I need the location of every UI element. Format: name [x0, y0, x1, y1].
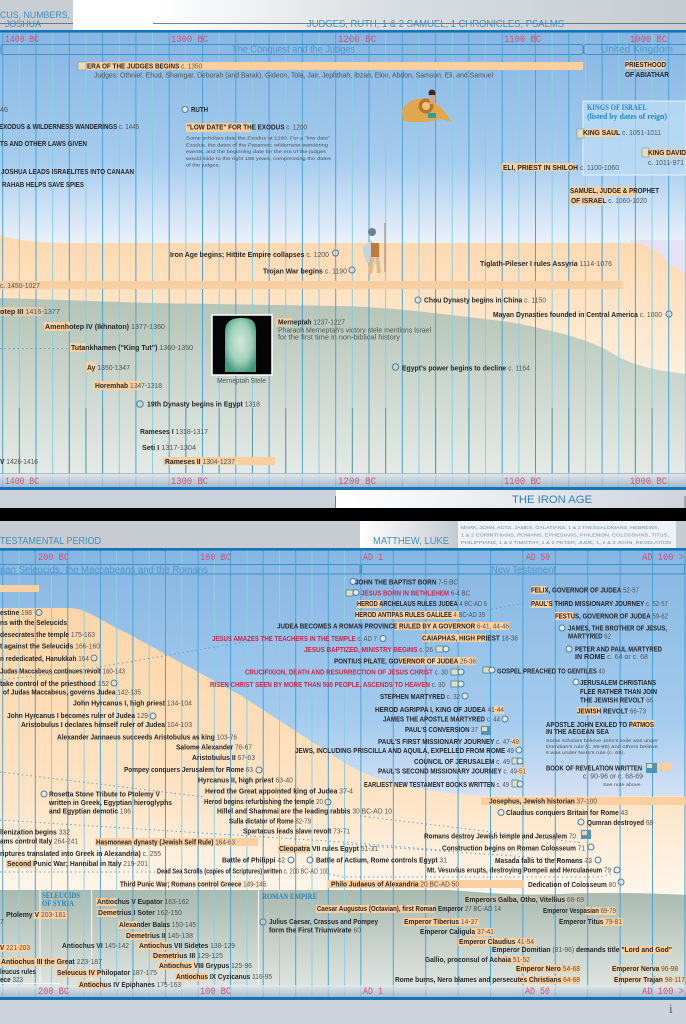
- era bar: united kingdom: United Kingdom: [601, 44, 673, 56]
- felix: FELIX, GOVERNOR OF JUDEA 52-57: [531, 586, 639, 594]
- header band: [0, 0, 686, 31]
- era bar: seleucids, maccabeans, romans: rian Seleucids, the Maccabeans and the Romans: [0, 565, 208, 576]
- stele caption: Merneptah Stele: [217, 376, 266, 385]
- era bar: conquest and judges: The Conquest and the Judges: [232, 44, 355, 56]
- long bar 1450-1027: [0, 281, 623, 290]
- top year scale: 100 BC: [200, 553, 231, 564]
- maccabean entries: Hillel and Shammai are the leading rabbis 30 BC-AD 10: [217, 806, 392, 816]
- jerusalem christians: [573, 678, 657, 704]
- battle of philippi: Battle of Philippi 42: [222, 856, 285, 864]
- eli: ELI, PRIEST IN SHILOH c. 1100-1060: [503, 163, 619, 172]
- top year scale: 1400 BC: [5, 35, 39, 46]
- panel: intertestamental period and new testament: [0, 521, 686, 1024]
- laws given: TS AND OTHER LAWS GIVEN: [0, 139, 87, 148]
- antiochus ix: Antiochus IX Cyzicanus 116-95: [176, 972, 272, 981]
- dotted connectors: [0, 603, 617, 877]
- green lowland band: [0, 890, 686, 998]
- antiochus iii: Antiochus III the Great 223-187: [1, 957, 102, 966]
- kings of israel panel: (listed by dates of reign): [587, 112, 667, 121]
- panel: the iron age timeline: [0, 0, 686, 508]
- seleucus rules: leucus rules: [0, 967, 36, 976]
- sky background: [0, 32, 686, 247]
- samuel: SAMUEL, JUDGE & PROPHET: [570, 186, 659, 195]
- bottom year scale: AD 1: [363, 987, 383, 998]
- footer band with the iron age title: [0, 487, 686, 508]
- james the brother of jesus: MARTYRED 62: [568, 632, 611, 640]
- antiochus iv: Antiochus IV Epiphanes 175-163: [79, 980, 181, 989]
- rameses i: Rameses I 1318-1317: [140, 427, 208, 436]
- iron age begins: Iron Age begins; Hittite Empire collapses c. 1200: [170, 250, 329, 259]
- book of revelation: See note above.: [603, 782, 642, 787]
- first triumvirate: [260, 917, 379, 934]
- antiochus vi: Antiochus VI 145-142: [62, 941, 129, 950]
- fragment 1426-1416: V 1426-1416: [0, 457, 38, 466]
- vespasian: Emperor Vespasian 69-79: [543, 906, 616, 915]
- maccabean entries: John Hyrcanus I becomes ruler of Judea 129: [7, 711, 148, 720]
- king saul: KING SAUL c. 1051-1011: [583, 128, 661, 137]
- illustration: samson and the lion: [402, 90, 452, 122]
- low date note: Some scholars date the Exodus at 1290. For a "low date": [186, 136, 330, 140]
- antiochus vii: Antiochus VII Sidetes 138-129: [139, 941, 235, 950]
- seleucus iv: Seleucus IV Philopator 187-175: [57, 968, 157, 977]
- stephen: STEPHEN MARTYRED c. 32: [380, 692, 460, 701]
- nineteenth dynasty: 19th Dynasty begins in Egypt 1318: [147, 400, 260, 408]
- book of revelation: BOOK OF REVELATION WRITTEN: [546, 764, 642, 772]
- jerusalem christians: THE JEWISH REVOLT 66: [580, 696, 653, 704]
- merneptah note: Pharaoh Merneptah's victory stele mentions Israel: [278, 326, 431, 334]
- header band: TESTAMENTAL PERIOD: [0, 536, 101, 547]
- dead sea scrolls: Dead Sea Scrolls (copies of Scriptures) written c. 200 BC-AD 100: [157, 866, 329, 876]
- maccabean entries: estine 198: [0, 608, 32, 617]
- maccabean entries: [0, 608, 392, 836]
- james the apostle: JAMES THE APOSTLE MARTYRED c. 44: [383, 714, 500, 724]
- scriptures translated: riptures translated into Greek in Alexandria) c. 255: [0, 849, 161, 858]
- festus: FESTUS, GOVERNOR OF JUDEA 59-62: [555, 612, 668, 620]
- caiaphas: CAIAPHAS, HIGH PRIEST 18-36: [422, 634, 518, 642]
- right-hand lilac horizon: [630, 240, 686, 300]
- ruth: [182, 105, 208, 114]
- augustus: Caesar Augustus (Octavian), first Roman Emperor 27 BC-AD 14: [317, 904, 501, 913]
- amenhotep iii: otep III 1416-1377: [0, 307, 60, 316]
- amenhotep iv: Amenhotep IV (Ikhnaton) 1377-1360: [45, 322, 165, 331]
- apostle john exiled: APOSTLE JOHN EXILED TO PATMOS: [546, 720, 654, 729]
- seleucids heading: SELEUCIDS: [42, 891, 80, 900]
- jewish revolt: JEWISH REVOLT 66-73: [577, 706, 646, 716]
- top year scale: 1100 BC: [504, 35, 541, 46]
- seleucus rules: ece 323: [0, 975, 23, 984]
- bottom year scale: [5, 477, 667, 488]
- jews expelled: JEWS, INCLUDING PRISCILLA AND AQUILA, EXPELLED FROM ROME 49: [295, 746, 514, 755]
- herod archelaus: HEROD ARCHELAUS RULES JUDEA 4 BC-AD 6: [357, 599, 487, 608]
- footer band with the iron age title: THE IRON AGE: [512, 494, 592, 506]
- maccabean entries: Pompey conquers Jerusalem for Rome 63: [124, 765, 253, 774]
- rosetta stone: written in Greek, Egyptian hieroglyphs: [48, 798, 172, 807]
- header band: CUS, NUMBERS,: [0, 10, 70, 20]
- header band: PHILIPPIANS, 1 & 2 TIMOTHY, 1 & 2 PETER, JUDE, 1, 2 & 3 JOHN, REVELATION: [461, 540, 671, 545]
- seleucids heading: OF SYRIA: [42, 899, 74, 908]
- low date note: would slide to the right 156 years, compressing the dates: [186, 156, 332, 161]
- risen christ: RISEN CHRIST SEEN BY MORE THAN 500 PEOPLE, ASCENDS TO HEAVEN c. 30: [210, 680, 445, 689]
- apostle john exiled: IN THE AEGEAN SEA: [546, 727, 610, 736]
- masada: Masada falls to the Romans 73: [495, 856, 592, 865]
- joshua: JOSHUA LEADS ISRAELITES INTO CANAAN: [1, 167, 134, 176]
- merneptah note: for the first time in non-biblical history: [278, 332, 400, 342]
- demetrius iii: Demetrius III 129-125: [153, 951, 223, 960]
- ptolemy v: Ptolemy V 203-181: [6, 910, 66, 919]
- jesus baptized: JESUS BAPTIZED, MINISTRY BEGINS c. 26: [304, 645, 433, 654]
- domitian: Emperor Domitian (81-96) demands title "Lord and God": [492, 945, 672, 954]
- earliest nt books: EARLIEST NEW TESTAMENT BOOKS WRITTEN c. 49: [364, 780, 509, 789]
- mayan dynasties: Mayan Dynasties founded in Central America c. 1000: [493, 310, 662, 319]
- second punic war: Second Punic War; Hannibal in Italy 219-201: [7, 859, 148, 868]
- cleopatra: Cleopatra VII rules Egypt 51-31: [279, 844, 378, 853]
- council of jerusalem: COUNCIL OF JERUSALEM c. 49: [414, 757, 510, 766]
- bottom year scale: 1000 BC: [630, 477, 667, 488]
- peter and paul: PETER AND PAUL MARTYRED: [575, 644, 662, 654]
- hellenization: llenization begins 332: [0, 828, 70, 836]
- paul's conversion: PAUL'S CONVERSION 37: [405, 725, 478, 734]
- nerva: Emperor Nerva 96-98: [612, 964, 678, 973]
- patmos note: Domitian's rule (c. 85-86) and others believe: [546, 744, 659, 749]
- header band: JUDGES, RUTH, 1 & 2 SAMUEL, 1 CHRONICLES, PSALMS: [307, 19, 564, 30]
- header band: 1 & 2 CORINTHIANS, ROMANS, EPHESIANS, PHILEMON, COLOSSIANS, TITUS,: [461, 532, 669, 538]
- maccabean entries: Alexander Jannaeus succeeds Aristobulus as king 103-76: [57, 732, 237, 742]
- desert ground band: [0, 608, 686, 895]
- trajan: Emperor Trajan 98-117: [614, 975, 685, 984]
- james the brother of jesus: [559, 624, 667, 640]
- bottom scale fade: [0, 985, 686, 998]
- bottom year scale: 1400 BC: [5, 477, 39, 488]
- qumran: Qumran destroyed 68: [587, 818, 653, 827]
- first missionary journey: PAUL'S FIRST MISSIONARY JOURNEY c. 47-49: [378, 737, 519, 746]
- apostle john exiled: [546, 720, 654, 736]
- pontius pilate: PONTIUS PILATE, GOVERNOR OF JUDEA 26-36: [334, 656, 476, 666]
- ay: Ay 1350-1347: [87, 363, 130, 372]
- maccabean entries: t against the Seleucids 166-160: [0, 642, 100, 650]
- top year scale: 1000 BC: [630, 35, 667, 46]
- maccabean entries: Spartacus leads slave revolt 73-71: [243, 826, 350, 836]
- low date for the exodus: "LOW DATE" FOR THE EXODUS c. 1200: [187, 122, 307, 132]
- herod antipas: HEROD ANTIPAS RULES GALILEE 4 BC-AD 39: [355, 610, 485, 619]
- low date note: [186, 136, 332, 168]
- roman empire heading: ROMAN EMPIRE: [262, 892, 317, 901]
- maccabean entries: n rededicated, Hanukkah 164: [0, 654, 89, 663]
- rameses ii: Rameses II 1304-1237: [165, 457, 235, 466]
- chou dynasty: Chou Dynasty begins in China c. 1150: [424, 296, 546, 304]
- galba otho vitellius: Emperors Galba, Otho, Vitellius 68-69: [465, 895, 584, 904]
- top year scale: 1300 BC: [171, 35, 208, 46]
- era bar: united kingdom: [584, 44, 686, 56]
- tutankhamen: Tutankhamen ("King Tut") 1360-1350: [71, 343, 193, 352]
- panel separator: [0, 508, 686, 521]
- maccabean entries: John Hyrcanus I, high priest 134-104: [73, 698, 192, 708]
- top rule: [0, 548, 686, 551]
- desert ground band: [0, 235, 686, 380]
- grid columns: [3, 550, 685, 998]
- bottom year scale: 200 BC: [38, 987, 69, 998]
- top rule: [0, 30, 686, 33]
- priesthood of abiathar: OF ABIATHAR: [625, 70, 670, 79]
- king david: c. 1011-971: [648, 158, 684, 167]
- sky background: [0, 550, 686, 895]
- jerusalem christians: FLEE RATHER THAN JOIN: [580, 687, 657, 696]
- ptolemy iv fragment: V 221-203: [0, 943, 30, 952]
- maccabean entries: Aristobulus II 67-63: [192, 753, 255, 762]
- demetrius ii: Demetrius II 145-138: [126, 931, 193, 940]
- top year scale: 200 BC: [38, 553, 69, 564]
- colosseum construction: Construction begins on Roman Colosseum 71: [442, 844, 585, 852]
- date fragment: 46: [0, 105, 8, 114]
- maccabean entries: desecrates the temple 175-163: [0, 630, 95, 639]
- fragment: 7: [0, 917, 4, 926]
- header band: [0, 521, 686, 549]
- hasmonean dynasty: Hasmonean dynasty (Jewish Self Rule) 164-63: [96, 838, 235, 846]
- antiochus viii: Antiochus VIII Grypus 125-96: [159, 961, 252, 970]
- samuel: [570, 186, 659, 205]
- bottom year scale: 100 BC: [200, 987, 231, 998]
- titus: Emperor Titus 79-81: [559, 917, 622, 926]
- jesus amazes the teachers: JESUS AMAZES THE TEACHERS IN THE TEMPLE c. AD 7: [212, 634, 377, 643]
- claudius conquers britain: Claudius conquers Britain for Rome 43: [506, 808, 628, 817]
- era bar: new testament: [362, 564, 684, 576]
- third punic war: Third Punic War; Romans control Greece 149-146: [120, 880, 266, 888]
- era of the judges: ERA OF THE JUDGES BEGINS c. 1350: [87, 62, 202, 70]
- nero: Emperor Nero 54-68: [516, 964, 580, 973]
- philo: [328, 880, 524, 888]
- third missionary journey: PAUL'S THIRD MISSIONARY JOURNEY c. 52-57: [531, 599, 668, 608]
- kings of israel panel: KINGS OF ISRAEL: [587, 103, 647, 112]
- jerusalem christians: JERUSALEM CHRISTIANS: [580, 678, 656, 687]
- patmos note: Some scholars believe John's exile was under: [546, 738, 659, 743]
- header band: MARK, JOHN, ACTS, JAMES, GALATIANS, 1 & 2 THESSALONIANS, HEBREWS,: [461, 525, 659, 530]
- alexander balas: Alexander Balas 150-145: [119, 920, 196, 929]
- tutankhamen: [0, 343, 193, 352]
- bottom year scale: 1300 BC: [171, 477, 208, 488]
- top year scale: AD 1: [363, 553, 383, 564]
- merneptah note: Merneptah 1237-1227: [278, 318, 345, 326]
- tiberius: Emperor Tiberius 14-37: [404, 917, 478, 926]
- crucifixion: CRUCIFIXION, DEATH AND RESURRECTION OF JESUS CHRIST c. 30: [245, 668, 448, 676]
- top year scale: AD 50: [526, 553, 550, 564]
- josephus: [481, 796, 686, 806]
- illustration: soldier: [362, 223, 385, 274]
- maccabean entries: of Judas Maccabeus, governs Judea 142-135: [3, 688, 141, 696]
- merneptah note: [276, 318, 431, 342]
- gospel era entries: [210, 578, 672, 789]
- green lowland band: [0, 298, 686, 487]
- rosetta stone: [41, 790, 172, 816]
- era bar: seleucids, maccabeans, romans: [0, 564, 360, 576]
- john the baptist: JOHN THE BAPTIST BORN 7-5 BC: [355, 578, 458, 586]
- bottom scale fade: [0, 473, 686, 487]
- samuel: OF ISRAEL c. 1060-1020: [571, 196, 647, 205]
- seleucids heading: [42, 891, 80, 908]
- priesthood of abiathar: PRIESTHOOD: [625, 60, 666, 69]
- top year scale: 1200 BC: [338, 35, 376, 46]
- maccabean entries: Hyrcanus II, high priest 63-40: [198, 776, 293, 784]
- maccabean entries: Herod the Great appointed king of Judea 37-4: [205, 786, 353, 796]
- photo: merneptah stele: [212, 315, 272, 375]
- rahab: RAHAB HELPS SAVE SPIES: [2, 180, 84, 189]
- header band: JOSHUA: [5, 19, 41, 29]
- book of revelation: c. 90-96 or c. 68-69: [583, 772, 643, 780]
- trojan war: Trojan War begins c. 1190: [263, 266, 347, 276]
- exodus and wilderness wanderings: EXODUS & WILDERNESS WANDERINGS c. 1446: [0, 122, 139, 131]
- demetrius i: Demetrius I Soter 162-150: [98, 908, 182, 917]
- kings of israel panel: [577, 101, 686, 175]
- dedication of colosseum: Dedication of Colosseum 80: [528, 880, 616, 889]
- footer band: i: [669, 1001, 673, 1016]
- rome burns: Rome burns, Nero blames and persecutes Christians 64-68: [395, 975, 580, 984]
- maccabean entries: ns with the Seleucids: [0, 618, 67, 627]
- king david: [642, 148, 686, 167]
- world history entries: [0, 790, 686, 889]
- white dividers in the empires band: [0, 890, 258, 998]
- ruth: RUTH: [191, 105, 208, 114]
- gallio: Gallio, proconsul of Achaia 51-52: [425, 955, 530, 964]
- maccabean entries: Herod begins refurbishing the temple 20: [204, 797, 323, 806]
- gospel to gentiles: GOSPEL PREACHED TO GENTILES 40: [497, 666, 605, 676]
- empires band entries: [0, 891, 685, 989]
- priesthood of abiathar: [625, 60, 670, 79]
- patmos note: [546, 738, 659, 755]
- era bar: new testament: New Testament: [491, 565, 556, 576]
- book of revelation: [546, 763, 672, 787]
- footer band: [0, 997, 686, 1024]
- josephus: Josephus, Jewish historian 37-100: [489, 796, 597, 806]
- top year scale: [5, 35, 667, 46]
- battle of actium: Battle of Actium, Rome controls Egypt 31: [316, 856, 447, 864]
- judea a roman province: JUDEA BECOMES A ROMAN PROVINCE RULED BY A GOVERNOR 6-41, 44-46: [277, 622, 509, 630]
- maccabean entries: take control of the priesthood 152: [0, 679, 109, 688]
- era bar: conquest and judges: [1, 44, 583, 56]
- rameses ii: [163, 457, 275, 466]
- bottom year scale: 1200 BC: [338, 477, 376, 488]
- tiglath-pileser: Tiglath-Pileser I rules Assyria 1114-1076: [480, 259, 612, 268]
- bottom year scale: [38, 987, 684, 998]
- horemhab: Horemhab 1347-1318: [95, 381, 162, 390]
- peter and paul: IN ROME c. 64 or c. 68: [575, 652, 648, 661]
- patmos note: it was under Nero's rule (c. 68).: [546, 750, 625, 755]
- list of judges: Judges: Othniel, Ehud, Shamgar, Deborah (and Barak), Gideon, Tola, Jair, Jephthah, Ibzan, Elon, Abdon, Samson, Eli, and Samuel: [94, 70, 493, 80]
- bottom year scale: AD 50: [525, 987, 550, 998]
- maccabean entries: Aristobulus I declares himself ruler of Judea 104-103: [21, 720, 192, 729]
- bottom year scale: 1100 BC: [504, 477, 541, 488]
- first triumvirate: form the First Triumvirate 60: [269, 926, 361, 934]
- rosetta stone: and Egyptian demotic 196: [49, 806, 131, 816]
- top year scale: [38, 553, 684, 564]
- caligula: Emperor Caligula 37-41: [420, 927, 494, 936]
- temple destroyed: Romans destroy Jewish temple and Jerusalem 70: [424, 832, 576, 840]
- vesuvius: Mt. Vesuvius erupts, destroying Pompeii and Herculaneum 79: [427, 866, 611, 874]
- era of the judges: [78, 62, 583, 70]
- grid columns: [3, 32, 685, 487]
- rosetta stone: Rosetta Stone Tribute to Ptolemy V: [49, 790, 160, 798]
- peter and paul: [566, 644, 662, 661]
- egypt's decline: Egypt's power begins to decline c. 1164: [402, 364, 530, 372]
- maccabean entries: Salome Alexander 76-67: [176, 742, 252, 752]
- maccabean entries: Judas Maccabeus continues revolt 160-143: [0, 666, 125, 676]
- claudius: Emperor Claudius 41-54: [459, 937, 534, 946]
- low date note: Exodus, the dates of the Passover, wilderness wandering: [186, 142, 329, 147]
- short bar: [0, 585, 39, 592]
- low date note: events, and the beginning date for the era of the judges: [186, 149, 327, 154]
- low date note: of the judges.: [186, 162, 220, 168]
- maccabean entries: Sulla dictator of Rome 82-79: [229, 816, 311, 826]
- jesus born: JESUS BORN IN BETHLEHEM 6-4 BC: [361, 588, 470, 598]
- philo: Philo Judaeus of Alexandria 20 BC-AD 50: [331, 880, 459, 888]
- antiochus v: Antiochus V Eupator 163-162: [97, 897, 189, 906]
- herod agrippa: HEROD AGRIPPA I, KING OF JUDEA 41-44: [375, 705, 504, 714]
- first triumvirate: Julius Caesar, Crassus and Pompey: [269, 917, 379, 926]
- header band: MATTHEW, LUKE: [373, 536, 449, 547]
- long bar 1450-1027: c. 1450-1027: [0, 281, 40, 290]
- seti i: Seti I 1317-1304: [142, 443, 196, 452]
- second missionary journey: PAUL'S SECOND MISSIONARY JOURNEY c. 49-51: [378, 766, 526, 776]
- romans control italy: ams control Italy 264-241: [0, 836, 78, 846]
- seleucus rules: [0, 967, 36, 984]
